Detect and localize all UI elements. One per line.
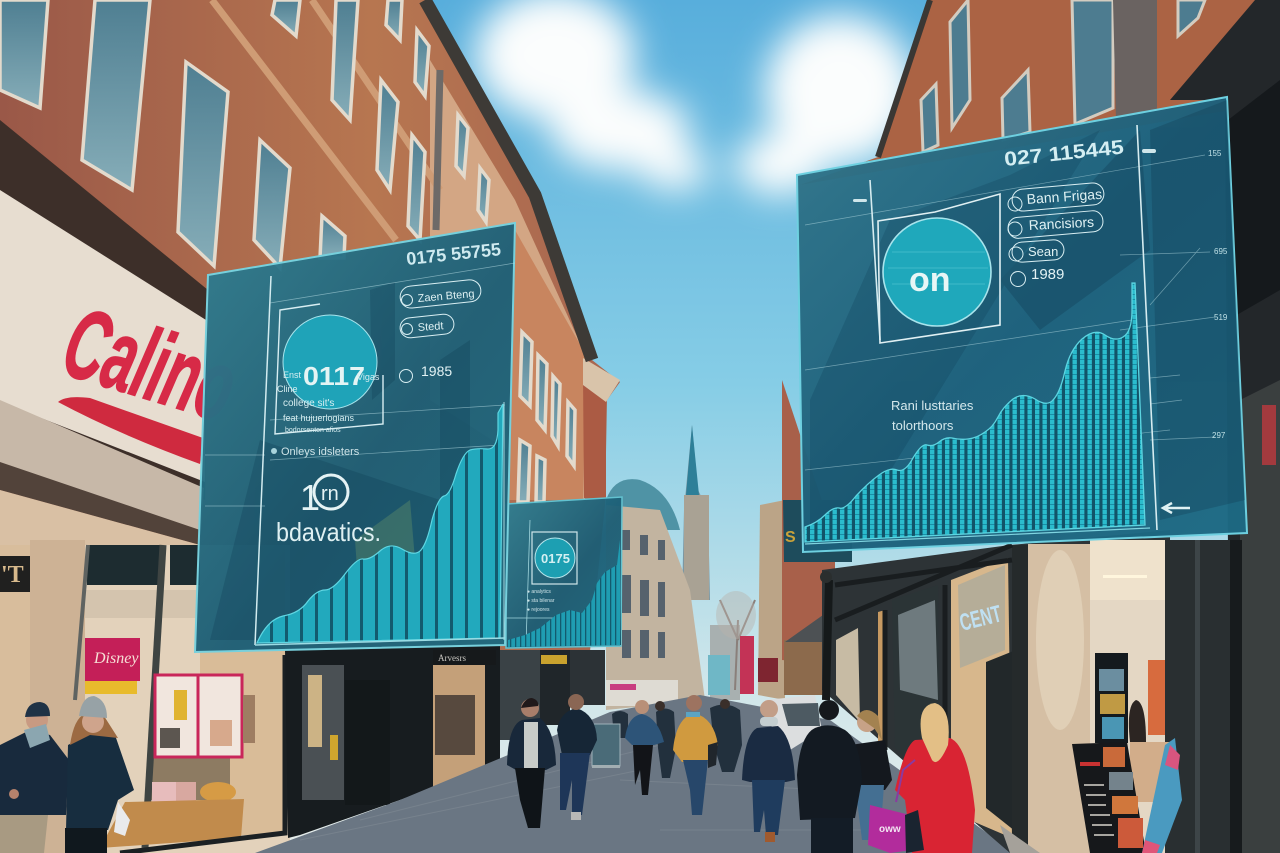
small badge: 0175 <box>541 551 570 566</box>
distant crowd <box>612 699 742 778</box>
pavement <box>255 695 1015 853</box>
axis labels: 519 <box>1214 313 1228 322</box>
legend items <box>271 279 482 458</box>
badge with number: college sit's <box>283 398 334 409</box>
right brick building <box>800 0 1255 185</box>
left brick building <box>0 0 620 700</box>
legend items: 1985 <box>421 363 452 379</box>
right analytics panel <box>797 97 1247 552</box>
person: woman in beanie <box>65 696 134 853</box>
logo: bdavatics: 1 <box>300 477 320 518</box>
legend items <box>1007 182 1105 286</box>
legend items: Bann Frigas <box>1026 186 1103 207</box>
grid lines <box>805 155 1215 470</box>
person: red coat woman with bag: oww <box>879 824 901 835</box>
person inside shop <box>1129 700 1146 742</box>
legend items: Stedt <box>417 320 444 334</box>
person: navy coat woman far left <box>625 700 664 795</box>
sandwich sign <box>592 724 620 768</box>
axis labels: 155 <box>1208 149 1222 158</box>
top number: 027 115445 <box>1003 137 1125 171</box>
small analytics panel: ● sta bilenar <box>527 598 555 604</box>
person: red coat woman with bag <box>868 703 975 853</box>
caption: Rani lusttaries <box>891 398 974 413</box>
dark shopfront center-left <box>285 645 605 838</box>
store sign: CENT: CENT <box>957 600 1004 637</box>
window posters <box>155 675 242 757</box>
y axis <box>255 276 271 645</box>
small analytics panel: ● analytics <box>527 589 551 595</box>
store sign: Calino <box>52 286 249 464</box>
person: yellow sweater <box>673 695 718 815</box>
white car <box>765 695 822 750</box>
person: man in dark jacket and grey shirt <box>507 698 556 828</box>
top number: 0175 55755 <box>405 239 502 269</box>
left store corner with sign <box>0 120 249 853</box>
logo: bdavatics: bdavatics. <box>276 517 381 547</box>
small badge <box>532 532 577 584</box>
left shop windows <box>0 540 290 853</box>
person: man in cap <box>0 702 69 853</box>
axis labels <box>1208 149 1228 440</box>
arrow <box>1163 503 1190 513</box>
right storefront <box>820 530 1242 853</box>
person: man walking away <box>557 694 597 820</box>
axis labels: 297 <box>1212 431 1226 440</box>
right analytics panel: tolorthoors <box>892 418 954 433</box>
left shop windows: 'T <box>1 562 24 588</box>
badge with number <box>275 304 383 434</box>
legend items: 1989 <box>1031 266 1064 283</box>
badge with number: 0117 <box>303 361 365 391</box>
poster: Disney: Disney <box>93 650 139 667</box>
badge: on: on <box>909 261 951 299</box>
store sign: Calino: Calino <box>52 286 249 443</box>
legend items: Onleys idsleters <box>281 446 360 458</box>
building reflections <box>810 100 1245 530</box>
legend items: Sean <box>1028 244 1058 259</box>
A-board and banner <box>1072 738 1182 853</box>
grid lines <box>205 263 515 506</box>
area chart <box>805 283 1150 544</box>
distant buildings and spire <box>606 425 756 710</box>
logo: bdavatics <box>276 475 381 547</box>
axis ticks <box>853 149 1156 202</box>
legend items: Zaen Bteng <box>417 288 475 305</box>
right distant buildings <box>740 380 852 700</box>
dark shopfront center-left: Arvesrs <box>438 653 466 663</box>
left analytics panel <box>195 223 515 652</box>
badge with number: Enst <box>283 370 302 380</box>
shop poster column <box>1095 653 1128 743</box>
person: navy jacket scarf <box>742 700 795 842</box>
badge with number: bodorsenton afios <box>285 427 341 434</box>
logo: bdavatics: rn <box>321 483 339 505</box>
badge with number: Cline <box>277 384 298 394</box>
badge with number: feat hujuerlogians <box>283 413 355 423</box>
poster: Disney <box>85 638 140 694</box>
axis labels: 695 <box>1214 247 1228 256</box>
person: man in black hood <box>797 700 862 853</box>
right dark facade <box>1170 0 1280 853</box>
right distant buildings: S <box>785 529 796 546</box>
y axes <box>870 125 1157 530</box>
badge with number: Vigas <box>357 372 380 382</box>
legend items: Rancisiors <box>1028 214 1094 233</box>
person: woman in dark top with blue jeans <box>850 710 892 840</box>
area chart <box>255 404 505 645</box>
small analytics panel <box>506 497 622 648</box>
building reflections <box>210 282 500 640</box>
window display shelf <box>100 782 244 848</box>
small analytics panel: ● rejoores <box>527 607 550 613</box>
small chart <box>508 540 621 647</box>
badge: on <box>878 194 1000 343</box>
